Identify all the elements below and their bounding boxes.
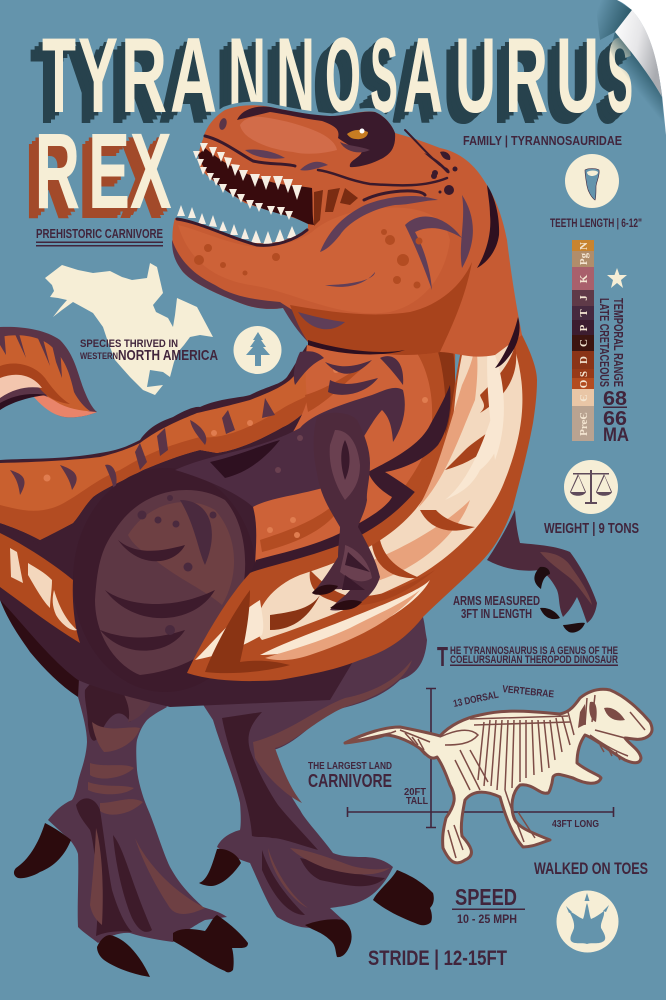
vertebrae label end: VERTEBRAE xyxy=(502,684,555,700)
text: largest carnivore: CARNIVORE xyxy=(308,771,392,791)
title: Tyrannosaurus: A xyxy=(162,22,209,142)
title: Tyrannosaurus: O xyxy=(313,26,349,146)
icon: footprint xyxy=(556,890,618,952)
teeth upper xyxy=(200,143,302,200)
title: Tyrannosaurus: N xyxy=(216,26,254,146)
far leg xyxy=(199,617,434,957)
chart: geologic timeline: N xyxy=(578,242,590,250)
teeth lower xyxy=(177,205,297,245)
chart: geologic timeline: PreЄ xyxy=(578,412,590,436)
text: temporal range: 68 xyxy=(603,388,627,410)
title: Tyrannosaurus: S xyxy=(595,26,621,146)
far arm xyxy=(487,510,597,633)
text: stride: STRIDE | 12-15FT xyxy=(368,947,507,970)
title: Tyrannosaurus: Y xyxy=(66,26,106,146)
text: species thrived: SPECIES THRIVED IN xyxy=(80,338,178,350)
chart: geologic timeline: O xyxy=(578,379,590,388)
claws right foot xyxy=(199,849,434,957)
text: largest carnivore xyxy=(308,760,392,791)
chart: geologic timeline: S xyxy=(578,371,590,377)
near leg xyxy=(14,660,248,977)
title: Tyrannosaurus: U xyxy=(451,19,492,139)
thigh xyxy=(73,468,257,692)
title: Tyrannosaurus: A xyxy=(158,26,205,146)
text: temporal range: TEMPORAL RANGE xyxy=(611,298,625,387)
shoulder purple with neck spikes xyxy=(175,351,405,507)
icon: tooth xyxy=(565,154,619,208)
title: Tyrannosaurus: A xyxy=(395,22,435,142)
text: arms measured xyxy=(453,594,540,621)
title: Tyrannosaurus: Y xyxy=(74,19,114,139)
near arm xyxy=(312,413,380,611)
title: Tyrannosaurus: N xyxy=(220,22,258,142)
chart: geologic timeline: C xyxy=(578,339,590,347)
title: Tyrannosaurus: S xyxy=(366,19,394,139)
text: arms measured: 3FT IN LENGTH xyxy=(461,607,532,621)
skeleton diagram xyxy=(345,684,652,863)
dark stripe xyxy=(250,385,450,575)
collar bands xyxy=(308,185,520,368)
title: Tyrannosaurus: T xyxy=(34,22,68,142)
text: largest carnivore: THE LARGEST LAND xyxy=(308,760,392,772)
claws left foot xyxy=(14,823,248,977)
title: Tyrannosaurus: R xyxy=(109,26,155,146)
dorsal vertebrae label: 13 DORSAL xyxy=(452,690,500,710)
title: Tyrannosaurus: N xyxy=(224,19,262,139)
mouth xyxy=(198,148,314,225)
title: Tyrannosaurus: N xyxy=(264,26,303,146)
cheek light xyxy=(178,207,450,313)
title: Tyrannosaurus: T xyxy=(38,19,72,139)
back orange band xyxy=(0,360,333,540)
title: Tyrannosaurus: R xyxy=(121,15,167,135)
icon: tree xyxy=(234,326,282,374)
lips and mouth lines xyxy=(205,130,447,200)
title: Rex: REX xyxy=(28,117,165,238)
title: Rex: REX xyxy=(31,114,168,235)
text: genus note: T xyxy=(437,641,448,672)
head xyxy=(172,105,522,368)
chart: geologic timeline: P xyxy=(578,324,590,331)
snout upper dark xyxy=(237,106,395,167)
title: Tyrannosaurus: R xyxy=(493,26,536,146)
text: temporal range xyxy=(597,298,629,446)
chart: geologic timeline: K xyxy=(578,274,590,283)
title: Tyrannosaurus: O xyxy=(321,19,357,139)
chart: geologic timeline xyxy=(572,240,594,441)
title: Tyrannosaurus: R xyxy=(497,22,540,142)
skull halo xyxy=(203,105,440,148)
icon: star xyxy=(607,268,627,288)
text: species thrived: WESTERN xyxy=(80,351,118,361)
text: temporal range: MA xyxy=(603,425,629,446)
title: Tyrannosaurus: U xyxy=(548,22,591,142)
title: Tyrannosaurus: U xyxy=(556,15,599,135)
tail tip xyxy=(0,327,97,417)
text: 20ft tall xyxy=(404,786,428,807)
text: speed: 10 - 25 MPH xyxy=(457,914,517,926)
subtitle: prehistoric carnivore: PREHISTORIC CARNIVORE xyxy=(36,227,163,241)
title: Rex: REX xyxy=(35,110,172,231)
text: family: FAMILY | TYRANNOSAURIDAE xyxy=(463,133,622,148)
title: Tyrannosaurus: U xyxy=(455,15,496,135)
title: Tyrannosaurus: R xyxy=(501,19,544,139)
text: species thrived xyxy=(80,338,218,364)
text: 20ft tall: TALL xyxy=(406,795,428,807)
eye xyxy=(340,128,370,152)
text: temporal range: 66 xyxy=(603,408,627,430)
skin bumps xyxy=(424,152,458,195)
snout light xyxy=(240,117,337,154)
title: Tyrannosaurus: T xyxy=(30,26,64,146)
text: 43ft long: 43FT LONG xyxy=(552,818,599,830)
text: speed xyxy=(452,884,525,926)
throat stripes xyxy=(314,188,358,226)
title: Tyrannosaurus: T xyxy=(42,15,76,135)
page curl xyxy=(595,0,666,135)
neck shade xyxy=(290,262,472,355)
title: Tyrannosaurus: S xyxy=(370,15,398,135)
text: arms measured: ARMS MEASURED xyxy=(453,594,540,608)
chart: geologic timeline: T xyxy=(578,309,590,317)
cheek purple xyxy=(245,149,473,329)
tail underside xyxy=(0,560,110,697)
title: Rex: REX xyxy=(25,120,162,241)
bones xyxy=(345,689,652,863)
chart: geologic timeline: J xyxy=(578,295,590,301)
chart: geologic timeline: D xyxy=(578,356,590,364)
title: Tyrannosaurus: A xyxy=(166,19,213,139)
teeth row two xyxy=(193,151,293,220)
title: Tyrannosaurus: N xyxy=(272,19,311,139)
title: Tyrannosaurus: S xyxy=(362,22,390,142)
title: Tyrannosaurus: A xyxy=(170,15,217,135)
title: Tyrannosaurus: U xyxy=(552,19,595,139)
title: Tyrannosaurus: S xyxy=(358,26,386,146)
title: Tyrannosaurus: A xyxy=(391,26,431,146)
title: Tyrannosaurus: U xyxy=(447,22,488,142)
text: species thrived: NORTH AMERICA xyxy=(118,347,218,364)
bone details xyxy=(352,695,645,858)
title: Tyrannosaurus: A xyxy=(403,15,443,135)
title: Tyrannosaurus: N xyxy=(228,15,266,135)
text: speed: SPEED xyxy=(455,884,517,910)
title: Tyrannosaurus: Y xyxy=(70,22,110,142)
title: Tyrannosaurus: R xyxy=(505,15,548,135)
title: Tyrannosaurus xyxy=(30,15,633,146)
text: genus note xyxy=(437,641,618,672)
title: Tyrannosaurus: R xyxy=(113,22,159,142)
title: Tyrannosaurus: O xyxy=(317,22,353,142)
skull and jaw xyxy=(172,105,522,357)
title: Tyrannosaurus: U xyxy=(544,26,587,146)
text: temporal range: LATE CRETACEOUS xyxy=(597,298,611,387)
torso dark xyxy=(0,345,450,707)
lower lip xyxy=(177,219,307,245)
title: Tyrannosaurus: N xyxy=(268,22,307,142)
icon: scale xyxy=(564,460,618,514)
belly xyxy=(187,250,537,681)
subtitle: prehistoric carnivore xyxy=(36,227,163,246)
title: Tyrannosaurus: R xyxy=(117,19,163,139)
dinosaur xyxy=(0,105,597,977)
title: Tyrannosaurus: A xyxy=(399,19,439,139)
title: Tyrannosaurus: N xyxy=(276,15,315,135)
nostril xyxy=(218,117,228,131)
map: North America xyxy=(45,263,213,395)
title: Tyrannosaurus: O xyxy=(325,15,361,135)
text: 20ft tall: 20FT xyxy=(404,786,427,798)
jaw rim xyxy=(172,240,330,342)
title: Tyrannosaurus: Y xyxy=(78,15,118,135)
chart: geologic timeline: Є xyxy=(578,394,590,402)
neck and chest orange xyxy=(253,345,455,565)
chart: geologic timeline: Pg xyxy=(578,252,590,265)
title: Tyrannosaurus: U xyxy=(443,26,484,146)
tail belly band xyxy=(0,500,85,643)
skeleton measure lines xyxy=(347,688,614,828)
